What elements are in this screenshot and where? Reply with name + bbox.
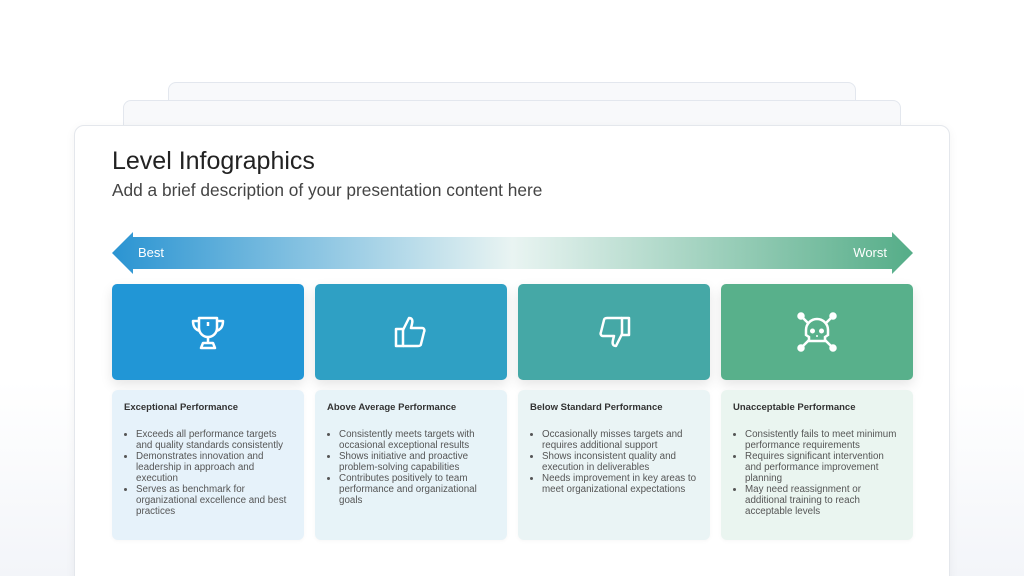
panel: unacceptable: Consistently fails to meet minimum performance requirements <box>745 429 896 451</box>
main card <box>74 125 950 576</box>
arrow: best to worst scale: Best <box>138 245 164 260</box>
panel: above average: Above Average Performance <box>327 402 456 413</box>
panel: exceptional <box>112 390 304 540</box>
tile: thumbs down <box>518 284 710 380</box>
panel: below standard: Shows inconsistent quality and execution in deliverables <box>542 451 676 473</box>
panel: above average <box>315 390 507 540</box>
panel: below standard: Occasionally misses targets and requires additional support <box>542 429 682 451</box>
arrow: best to worst scale: Worst <box>853 245 887 260</box>
tile: skull <box>721 284 913 380</box>
panel: above average: Shows initiative and proactive problem-solving capabilities <box>339 451 468 473</box>
arrow: best to worst scale <box>112 232 913 274</box>
panel: above average: Consistently meets targets with occasional exceptional results <box>339 429 475 451</box>
tile: trophy <box>112 284 304 380</box>
tile: thumbs up <box>315 284 507 380</box>
panel: exceptional: Demonstrates innovation and leadership in approach and execution <box>136 451 263 484</box>
panel: exceptional: Serves as benchmark for organizational excellence and best practices <box>136 484 286 517</box>
back card 2 <box>123 100 901 160</box>
panel: exceptional: Exceptional Performance <box>124 402 238 413</box>
panel: below standard: Below Standard Performance <box>530 402 663 413</box>
panel: unacceptable: Requires significant intervention and performance improvement planning <box>745 451 884 484</box>
back card 1 <box>168 82 856 142</box>
subtitle: Add a brief description of your presentation content here <box>112 180 542 200</box>
panel: unacceptable: Unacceptable Performance <box>733 402 856 413</box>
panel: unacceptable <box>721 390 913 540</box>
panel: below standard <box>518 390 710 540</box>
title: Level Infographics <box>112 147 315 175</box>
panel: unacceptable: May need reassignment or additional training to reach acceptable levels <box>745 484 861 517</box>
panel: below standard: Needs improvement in key areas to meet organizational expectations <box>542 473 696 495</box>
panel: exceptional: Exceeds all performance targets and quality standards consistently <box>136 429 283 451</box>
panel: above average: Contributes positively to team performance and organizational goals <box>339 473 477 506</box>
